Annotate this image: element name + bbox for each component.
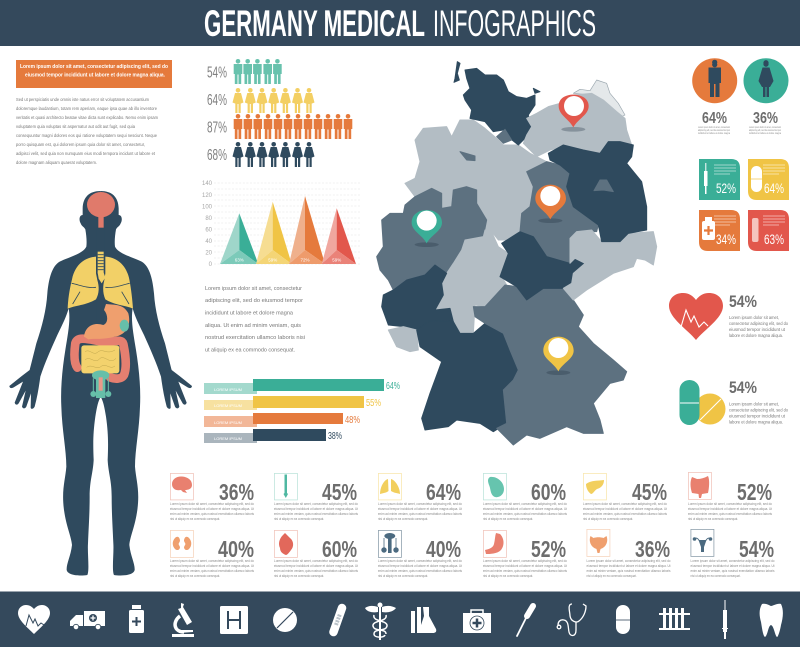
Saxony-Anhalt: [520, 162, 598, 263]
coloured stat tiles: [699, 159, 789, 251]
map of Germany: [377, 62, 657, 445]
Saxony: [563, 230, 657, 300]
tile: bandage 63%: 63%: [764, 231, 784, 247]
Mecklenburg-Vorpommern: [523, 93, 632, 157]
row: 68% dark women: [207, 142, 314, 167]
female circle: [744, 58, 788, 103]
icon: first aid kit: [463, 610, 491, 633]
card: female reproductive 54%: 54%: [739, 536, 774, 562]
card: heart organ 60%: [274, 530, 358, 578]
pill text: [729, 378, 789, 424]
bar 38%: [204, 429, 342, 443]
card: lungs 64%: Lorem ipsum dolor sit amet, consectetur adipiscing elit, sed do: [378, 502, 462, 506]
orange intro banner: eiusmod tempor incididunt ut labore et dolore magna aliqua.: [25, 72, 165, 78]
pill text: 54%: [729, 378, 757, 397]
orange triangle: [289, 196, 325, 264]
card: intestine 52%: nisi ut aliquip ex ea commodo consequat.: [688, 517, 738, 521]
card: bladder 36%: [586, 529, 671, 578]
Brandenburg: [548, 142, 647, 242]
large intestine: [74, 339, 126, 379]
card: male reproductive 40%: enim ad minim veniam, quis nostrud exercitation ullamco laboris: [378, 569, 462, 573]
bar 55%: [204, 396, 381, 410]
chart axis labels: 120: [202, 193, 213, 199]
card: oesophagus 45%: 45%: [322, 479, 357, 505]
card: lungs 64%: nisi ut aliquip ex ea commodo consequat.: [378, 517, 428, 521]
Hamburg: [497, 129, 512, 143]
icon: stethoscope: [557, 604, 586, 636]
map pin: red: [559, 95, 589, 132]
pill text: consectetur adipiscing elit, sed do: [729, 408, 789, 412]
header band with title: [0, 0, 800, 46]
card: liver 45%: [583, 473, 667, 521]
card: female reproductive 54%: eiusmod tempor incididunt ut labore et dolore magna aliqua. Ut: [690, 564, 775, 568]
Schleswig-Holstein: [454, 62, 540, 145]
yellow triangle: [256, 202, 292, 264]
card: lungs 64%: 64%: [426, 479, 461, 505]
Bremen: [460, 152, 475, 161]
intro body text: dolore magnam aliquam quaerat voluptatem.: [16, 160, 97, 165]
card: male reproductive 40%: nisi ut aliquip ex ea commodo consequat.: [378, 574, 428, 578]
heart text: eiusmod tempor incididunt ut: [729, 327, 786, 332]
card: intestine 52%: eiusmod tempor incididunt ut labore et dolore magna aliqua. Ut: [688, 507, 772, 511]
card: bladder 36%: eiusmod tempor incididunt ut labore et dolore magna aliqua. Ut: [586, 564, 671, 568]
intro body text: porro quisquam est, qui dolorem ipsum quia dolor sit amet, consectetur,: [16, 142, 145, 147]
female percent: incididunt ut labore et dolore magna: [749, 131, 781, 135]
card: female reproductive 54%: enim ad minim veniam, quis nostrud exercitation ullamco laboris: [690, 569, 775, 573]
card: intestine 52%: Lorem ipsum dolor sit amet, consectetur adipiscing elit, sed do: [688, 502, 772, 506]
icon: pills: [680, 380, 726, 425]
male circle: [692, 58, 737, 103]
card: kidneys 40%: enim ad minim veniam, quis nostrud exercitation ullamco laboris: [170, 569, 254, 573]
intro body text: veritatis et quasi architecto beatae vitae dicta sunt explicabo. Nemo enim ipsam: [16, 115, 158, 120]
intro body text: consequuntur magni dolores eos qui ratione voluptatem sequi nesciunt. Neque: [16, 133, 158, 138]
icon: capsule: [616, 605, 630, 634]
row: 54% teal men: [207, 59, 282, 84]
card: spleen 60%: 60%: [531, 479, 566, 505]
card: heart organ 60%: Lorem ipsum dolor sit amet, consectetur adipiscing elit, sed do: [274, 559, 358, 563]
bar 64%: 64%: [386, 381, 400, 392]
heart text: Lorem ipsum dolor sit amet,: [729, 315, 779, 320]
intro body text: [16, 97, 158, 165]
card: kidneys 40%: Lorem ipsum dolor sit amet, consectetur adipiscing elit, sed do: [170, 559, 254, 563]
female percent: adipiscing elit, sed do eiusmod tempor: [749, 128, 781, 132]
Lower Saxony: [405, 120, 547, 240]
card: heart organ 60%: 60%: [322, 536, 357, 562]
heart statistic: [669, 292, 789, 340]
pictogram statistics: [207, 59, 352, 167]
Saarland: [388, 327, 418, 352]
male and female share: [692, 58, 788, 135]
card: spleen 60%: Lorem ipsum dolor sit amet, consectetur adipiscing elit, sed do: [483, 502, 567, 506]
body silhouette: [9, 191, 192, 575]
card: female reproductive 54%: nisi ut aliquip ex ea commodo consequat.: [690, 574, 741, 578]
card: stomach 52%: 52%: [531, 536, 566, 562]
card: intestine 52%: 52%: [737, 479, 772, 505]
heart text: consectetur adipiscing elit, sed do: [729, 321, 789, 326]
icon: ambulance: [70, 611, 105, 630]
bar 48%: 48%: [345, 415, 360, 426]
chart axis labels: 0: [209, 262, 213, 268]
horizontal bar chart: [204, 379, 400, 443]
card: bladder 36%: nisi ut aliquip ex ea commodo consequat.: [586, 574, 637, 578]
intro body text: adipisci velit, sed quia non numquam eius modi tempora incidunt ut labore et: [16, 151, 156, 156]
chart axis labels: 80: [205, 216, 213, 222]
card: brain 36%: eiusmod tempor incididunt ut labore et dolore magna aliqua. Ut: [170, 507, 254, 511]
male percent: 64%: [702, 110, 727, 127]
card: female reproductive 54%: [690, 529, 775, 578]
intro body text: doloremque laudantium, totam rem aperiam, eaque ipsa quae ab illo inventore: [16, 106, 158, 111]
lungs: [68, 252, 133, 309]
chart axis labels: 100: [202, 204, 213, 210]
card: heart organ 60%: nisi ut aliquip ex ea commodo consequat.: [274, 574, 324, 578]
card: stomach 52%: Lorem ipsum dolor sit amet, consectetur adipiscing elit, sed do: [483, 559, 567, 563]
card: female reproductive 54%: Lorem ipsum dolor sit amet, consectetur adipiscing elit, sed do: [690, 559, 775, 563]
Berlin: [594, 180, 613, 192]
card: lungs 64%: [378, 473, 462, 521]
Thuringia: [500, 232, 585, 300]
bar 48%: [204, 413, 360, 427]
footer icon bar: [0, 592, 800, 647]
map pin: teal: [412, 210, 442, 247]
card: intestine 52%: enim ad minim veniam, quis nostrud exercitation ullamco laboris: [688, 512, 772, 516]
brain: [87, 192, 115, 228]
red triangle: 59%: [332, 258, 341, 262]
map pin: orange: [535, 185, 566, 223]
tile: medicine bottle 34%: 34%: [716, 231, 736, 247]
card: spleen 60%: nisi ut aliquip ex ea commodo consequat.: [483, 517, 533, 521]
middle text block: Lorem ipsum dolor sit amet, consectetur: [205, 286, 302, 292]
card: stomach 52%: nisi ut aliquip ex ea commodo consequat.: [483, 574, 533, 578]
header band with title: GERMANY MEDICAL: [204, 3, 425, 44]
card: oesophagus 45%: [274, 473, 358, 521]
card: oesophagus 45%: eiusmod tempor incididunt ut labore et dolore magna aliqua. Ut: [274, 507, 358, 511]
card: spleen 60%: [483, 473, 567, 521]
middle text block: nostrud exercitation ullamco laboris nisi: [205, 335, 305, 341]
card: brain 36%: 36%: [219, 479, 254, 505]
icon: medicine bottle: [129, 605, 144, 633]
bar 55%: LOREM IPSUM: [214, 403, 242, 408]
card: oesophagus 45%: nisi ut aliquip ex ea commodo consequat.: [274, 517, 324, 521]
heart text: labore et dolore magna aliqua.: [729, 333, 783, 338]
small intestine: [81, 345, 119, 373]
male percent: incididunt ut labore et dolore magna: [698, 131, 730, 135]
header band with title: INFOGRAPHICS: [433, 3, 596, 44]
icon: heart: [669, 293, 723, 340]
icon: bandage: [334, 608, 342, 632]
stomach: [84, 304, 129, 339]
card: liver 45%: enim ad minim veniam, quis nostrud exercitation ullamco laboris: [583, 512, 667, 516]
yellow triangle: 59%: [268, 258, 277, 262]
heart text: 54%: [729, 292, 757, 311]
icon: thermometer: [517, 606, 533, 636]
chart axis labels: [202, 181, 213, 268]
card: male reproductive 40%: Lorem ipsum dolor sit amet, consectetur adipiscing elit, sed do: [378, 559, 462, 563]
bar 64%: LOREM IPSUM: [214, 387, 242, 392]
icon: caduceus: [365, 602, 396, 640]
tile: capsule 64%: 64%: [764, 180, 784, 196]
card: kidneys 40%: nisi ut aliquip ex ea commodo consequat.: [170, 574, 220, 578]
middle text block: ut aliquip ex ea commodo consequat.: [205, 348, 295, 354]
card: brain 36%: Lorem ipsum dolor sit amet, consectetur adipiscing elit, sed do: [170, 502, 254, 506]
card: stomach 52%: eiusmod tempor incididunt ut labore et dolore magna aliqua. Ut: [483, 564, 567, 568]
chart grid lines and axis: [214, 183, 361, 264]
male percent: adipiscing elit, sed do eiusmod tempor: [698, 128, 730, 132]
chart axis labels: 140: [202, 181, 213, 187]
card: brain 36%: nisi ut aliquip ex ea commodo consequat.: [170, 517, 220, 521]
organ statistic cards: [170, 472, 775, 578]
male percent: [698, 110, 730, 135]
female percent: Lorem ipsum dolor sit amet, consectetur: [749, 125, 781, 129]
pill text: eiusmod tempor incididunt ut: [729, 414, 786, 418]
middle text block: incididunt ut labore et dolore magna: [205, 310, 294, 316]
card: liver 45%: nisi ut aliquip ex ea commodo consequat.: [583, 517, 633, 521]
card: bladder 36%: Lorem ipsum dolor sit amet, consectetur adipiscing elit, sed do: [586, 559, 671, 563]
card: brain 36%: [170, 473, 254, 521]
female percent: 36%: [753, 110, 778, 127]
middle text block: [205, 286, 305, 354]
card: kidneys 40%: eiusmod tempor incididunt ut labore et dolore magna aliqua. Ut: [170, 564, 254, 568]
teal triangle: 63%: [235, 258, 244, 262]
card: liver 45%: 45%: [632, 479, 667, 505]
Baltic islands of Ruegen: [573, 80, 625, 118]
orange intro banner: Lorem ipsum dolor sit amet, consectetur adipiscing elit, sed do: [20, 64, 168, 70]
bar 55%: 55%: [366, 398, 381, 409]
card: kidneys 40%: 40%: [218, 536, 254, 562]
intro body text: Sed ut perspiciatis unde omnis iste natus error sit voluptatem accusantium: [16, 97, 149, 102]
card: heart organ 60%: eiusmod tempor incididunt ut labore et dolore magna aliqua. Ut: [274, 564, 358, 568]
row: 87% orange men: [207, 114, 352, 139]
row: 68% dark women: 68%: [207, 147, 227, 164]
row: 64% yellow women: 64%: [207, 92, 227, 109]
bar 64%: [204, 379, 400, 394]
orange triangle: 72%: [300, 258, 310, 262]
teal triangle: [220, 213, 258, 264]
bar 38%: 38%: [328, 431, 342, 442]
card: spleen 60%: eiusmod tempor incididunt ut labore et dolore magna aliqua. Ut: [483, 507, 567, 511]
triangle chart: [202, 181, 361, 268]
row: 54% teal men: 54%: [207, 64, 227, 82]
Bavaria: [473, 285, 627, 445]
North Rhine-Westphalia: [377, 187, 487, 290]
tile: syringe 52%: 52%: [716, 180, 736, 196]
bar 48%: LOREM IPSUM: [214, 420, 242, 425]
Rhineland-Palatinate: [382, 265, 453, 330]
icon: laboratory flasks: [411, 607, 436, 633]
heart text: [729, 292, 789, 338]
chart axis labels: 20: [205, 250, 213, 256]
red triangle: [322, 208, 356, 264]
middle text block: aliqua. Ut enim ad minim veniam, quis: [205, 323, 301, 329]
card: spleen 60%: enim ad minim veniam, quis nostrud exercitation ullamco laboris: [483, 512, 567, 516]
bladder and reproductive organs: [90, 370, 111, 398]
pill statistic: [680, 378, 789, 425]
female percent: [749, 110, 781, 135]
card: male reproductive 40%: eiusmod tempor incididunt ut labore et dolore magna aliqua. Ut: [378, 564, 462, 568]
row: 64% yellow women: [207, 88, 314, 113]
card: lungs 64%: eiusmod tempor incididunt ut labore et dolore magna aliqua. Ut: [378, 507, 462, 511]
card: male reproductive 40%: [378, 530, 462, 578]
icon: syringe: [722, 600, 728, 639]
card: liver 45%: eiusmod tempor incididunt ut labore et dolore magna aliqua. Ut: [583, 507, 667, 511]
card: stomach 52%: [483, 530, 567, 578]
human body figure with organs: [9, 191, 192, 575]
pill text: Lorem ipsum dolor sit amet,: [729, 402, 779, 406]
card: oesophagus 45%: Lorem ipsum dolor sit amet, consectetur adipiscing elit, sed do: [274, 502, 358, 506]
Baden-Wuerttemberg: [417, 321, 518, 432]
card: brain 36%: enim ad minim veniam, quis nostrud exercitation ullamco laboris: [170, 512, 254, 516]
icon: microscope: [172, 603, 194, 637]
Hesse: [435, 230, 508, 333]
card: liver 45%: Lorem ipsum dolor sit amet, consectetur adipiscing elit, sed do: [583, 502, 667, 506]
chart axis labels: 60: [205, 228, 213, 234]
male percent: Lorem ipsum dolor sit amet, consectetur: [698, 125, 730, 129]
map pin: yellow: [543, 337, 574, 375]
card: bladder 36%: enim ad minim veniam, quis nostrud exercitation ullamco laboris: [586, 569, 671, 573]
card: kidneys 40%: [170, 530, 254, 578]
card: lungs 64%: enim ad minim veniam, quis nostrud exercitation ullamco laboris: [378, 512, 462, 516]
card: stomach 52%: enim ad minim veniam, quis nostrud exercitation ullamco laboris: [483, 569, 567, 573]
icon: test tube rack: [659, 608, 690, 630]
row: 87% orange men: 87%: [207, 120, 227, 136]
icon: heart: [18, 605, 50, 634]
pill text: labore et dolore magna aliqua.: [729, 420, 783, 424]
card: male reproductive 40%: 40%: [426, 536, 461, 562]
icon: tablet: [273, 608, 297, 632]
orange intro banner: [16, 60, 172, 88]
icon: tooth: [760, 604, 783, 637]
chart axis labels: 40: [205, 239, 213, 245]
card: oesophagus 45%: enim ad minim veniam, quis nostrud exercitation ullamco laboris: [274, 512, 358, 516]
bar 38%: LOREM IPSUM: [214, 436, 242, 441]
card: bladder 36%: 36%: [635, 536, 670, 562]
card: heart organ 60%: enim ad minim veniam, quis nostrud exercitation ullamco laboris: [274, 569, 358, 573]
icon: hospital sign: [220, 606, 248, 634]
intro body text: voluptatem quia voluptas sit aspernatur aut odit aut fugit, sed quia: [16, 124, 136, 129]
card: intestine 52%: [688, 472, 772, 521]
middle text block: adipiscing elit, sed do eiusmod tempor: [205, 298, 303, 304]
